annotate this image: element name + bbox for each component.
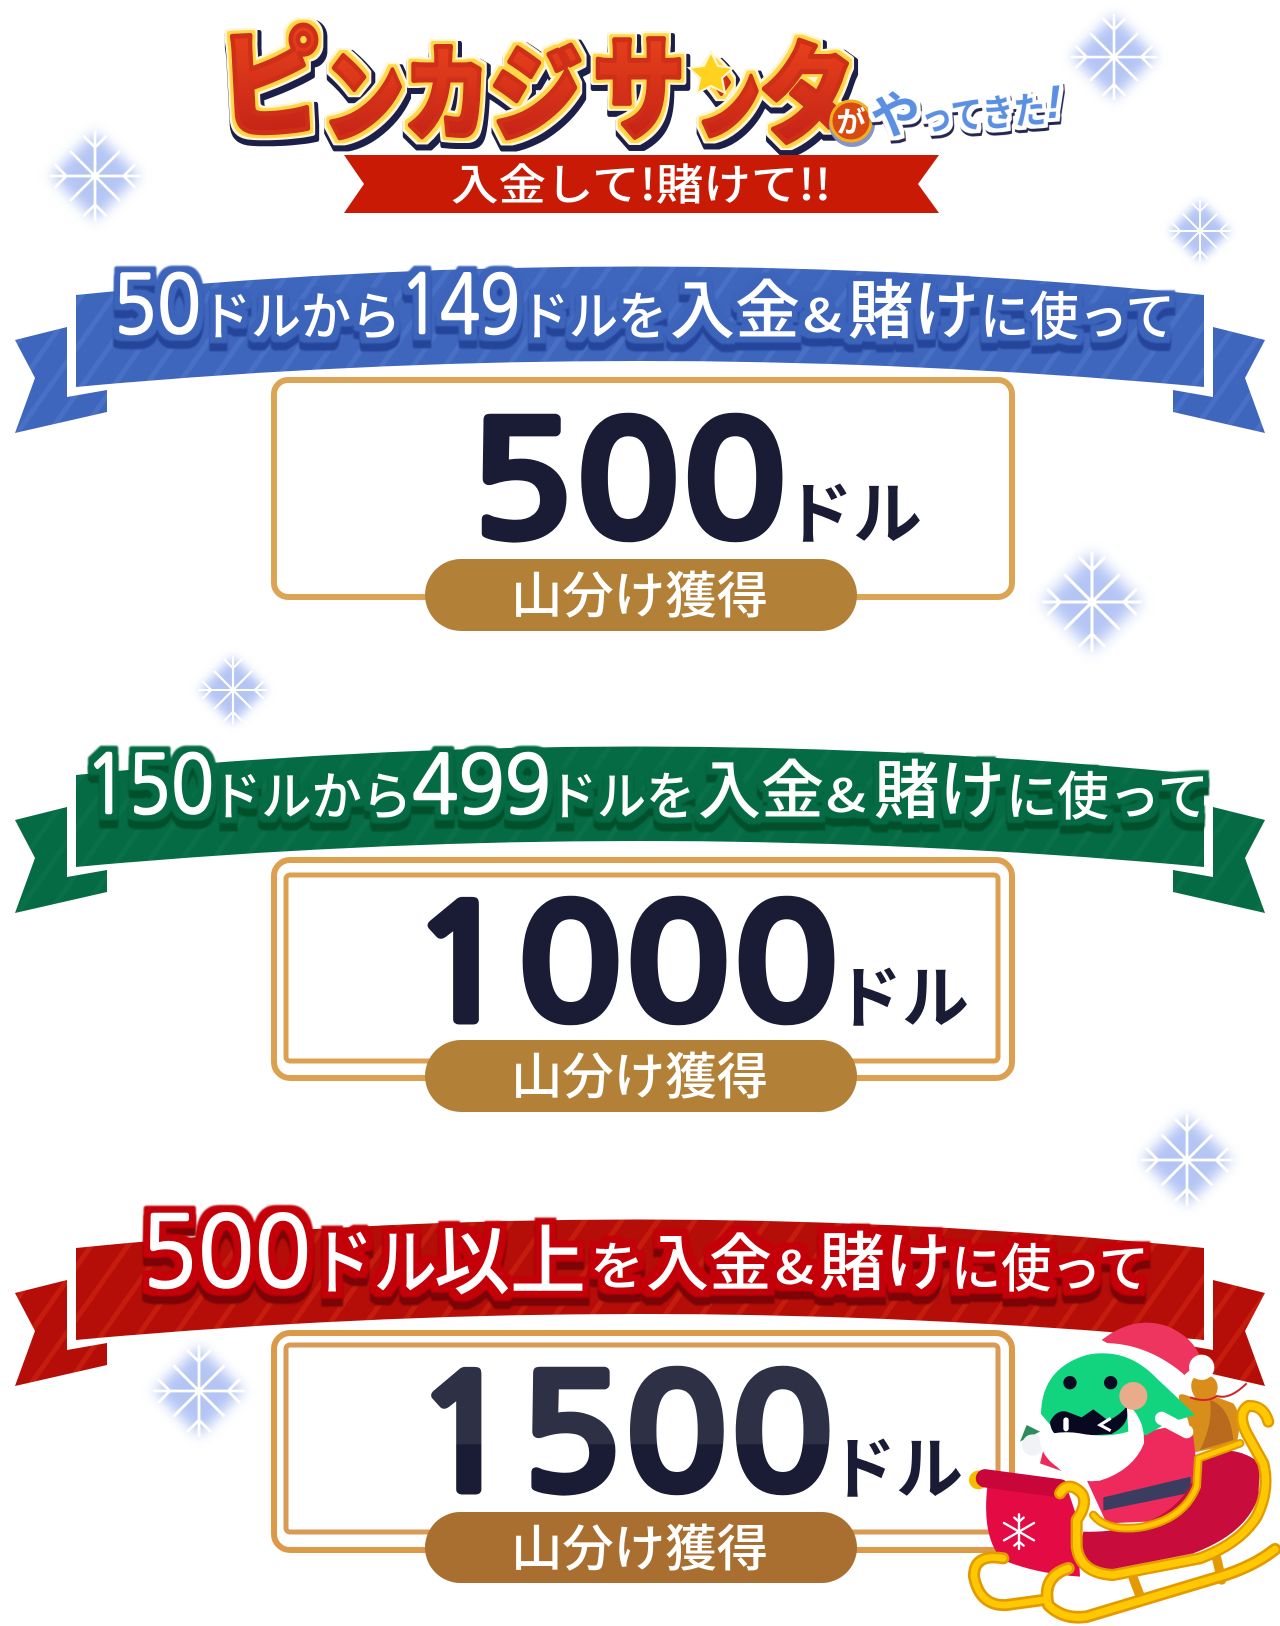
ribbon: green: [15, 746, 1265, 913]
title particle ga badge: [829, 99, 875, 147]
pill label: 山分け獲得: [511, 556, 768, 628]
title particle ga badge: が: [836, 99, 866, 141]
snowflake top right: [1072, 15, 1156, 99]
prize box: [274, 380, 1012, 597]
prize amount 1000: [408, 886, 969, 1045]
green head: [1041, 1353, 1195, 1437]
snowflake small right: [1170, 201, 1230, 261]
ribbon heading blue: 入金: [670, 260, 800, 352]
title logo: ジ: [490, 38, 582, 154]
prize amount 1500: ドル: [829, 1414, 963, 1513]
title logo: ピ: [216, 17, 326, 155]
snowflake top left: [51, 132, 139, 220]
ribbon: blue: [15, 266, 1265, 433]
hat: [1095, 1323, 1214, 1382]
santa body: [1040, 1427, 1198, 1523]
ribbon heading blue: 50: [113, 265, 201, 345]
panel: tier 2: [15, 740, 1265, 1112]
ribbon heading red: 500: [141, 1204, 311, 1302]
prize amount 500: ドル: [784, 459, 922, 558]
hand with tree: [1020, 1425, 1043, 1456]
ribbon heading blue: ドルを: [520, 275, 667, 350]
ribbon: red: [15, 1220, 1265, 1386]
pill label: 山分け獲得: [511, 1509, 768, 1581]
mouth: [1050, 1407, 1128, 1437]
prize amount 1000: 1000: [408, 886, 840, 1045]
ribbon heading red: に使って: [951, 1227, 1149, 1302]
nose: [1119, 1382, 1147, 1410]
beard: [1039, 1403, 1144, 1481]
snowflake lower left: [154, 1346, 244, 1436]
sleigh body rear: [1082, 1451, 1260, 1572]
pill label: [425, 556, 857, 631]
ribbon heading green: ドルを: [548, 755, 695, 830]
ribbon heading red: を: [590, 1225, 644, 1300]
prize box double border: [274, 860, 1012, 1078]
ribbon heading green: ドルから: [211, 755, 412, 830]
pill label: [425, 1509, 857, 1583]
ribbon heading red: 入金: [646, 1213, 772, 1303]
sleigh gold frame: [974, 1406, 1275, 1617]
title subtext: ってきた: [919, 89, 1047, 139]
ribbon heading green: 150: [85, 745, 214, 825]
prize amount 500: 500: [468, 403, 788, 562]
ribbon heading red: 賭け: [819, 1212, 951, 1304]
panel: tier 1: [15, 260, 1265, 631]
ribbon heading blue: ドルから: [201, 275, 401, 350]
red subtitle banner: [344, 151, 939, 213]
sleigh body front: [969, 1471, 1080, 1577]
snowflake middle left: [199, 656, 267, 724]
prize amount 1500: 1500: [412, 1356, 835, 1515]
eyes: [1063, 1376, 1117, 1389]
ribbon heading red: &: [775, 1232, 814, 1298]
title logo: [216, 17, 855, 158]
ribbon heading red: [141, 1200, 1149, 1310]
title logo: タ: [760, 35, 855, 158]
pill label: 山分け獲得: [511, 1037, 768, 1109]
belt: [1103, 1477, 1191, 1511]
title logo: カ: [404, 38, 490, 154]
sleigh snowflake emblem: [1004, 1514, 1034, 1549]
prize amount 1000: ドル: [835, 943, 969, 1042]
illustration: santa mascot on sleigh: [969, 1323, 1275, 1617]
ribbon heading green: &: [826, 760, 866, 826]
snowflake beside first box: [1043, 553, 1141, 651]
title subtext: !: [1044, 75, 1063, 128]
sack: [1179, 1377, 1247, 1453]
ribbon heading blue: に使って: [980, 275, 1175, 350]
title subtext: [869, 75, 1063, 146]
prize box double border: [274, 1333, 1012, 1550]
pill label: [425, 1037, 857, 1112]
red subtitle banner: 入金して!賭けて!!: [451, 151, 831, 213]
ribbon heading green: に使って: [1006, 755, 1209, 830]
title logo: ン: [697, 52, 760, 151]
panel: tier 3: [15, 1200, 1265, 1583]
title logo: ン: [323, 43, 404, 155]
ribbon heading green: 賭け: [874, 740, 1005, 832]
arm cuff: [1162, 1418, 1187, 1432]
title logo: サ: [593, 28, 685, 153]
ribbon heading blue: &: [803, 280, 842, 346]
ribbon heading blue: [113, 260, 1175, 352]
ribbon heading blue: 149: [400, 265, 520, 345]
ribbon heading blue: 賭け: [848, 260, 979, 352]
ribbon heading green: 499: [412, 745, 551, 825]
snowflake lower right: [1142, 1115, 1232, 1205]
title star: [689, 52, 733, 93]
ribbon heading red: 以上: [434, 1200, 586, 1310]
ribbon heading green: 入金: [698, 740, 824, 832]
title subtext: や: [869, 86, 922, 146]
prize amount 500: [468, 403, 922, 562]
ribbon heading red: ドル: [310, 1204, 437, 1309]
ribbon heading green: [85, 740, 1209, 832]
